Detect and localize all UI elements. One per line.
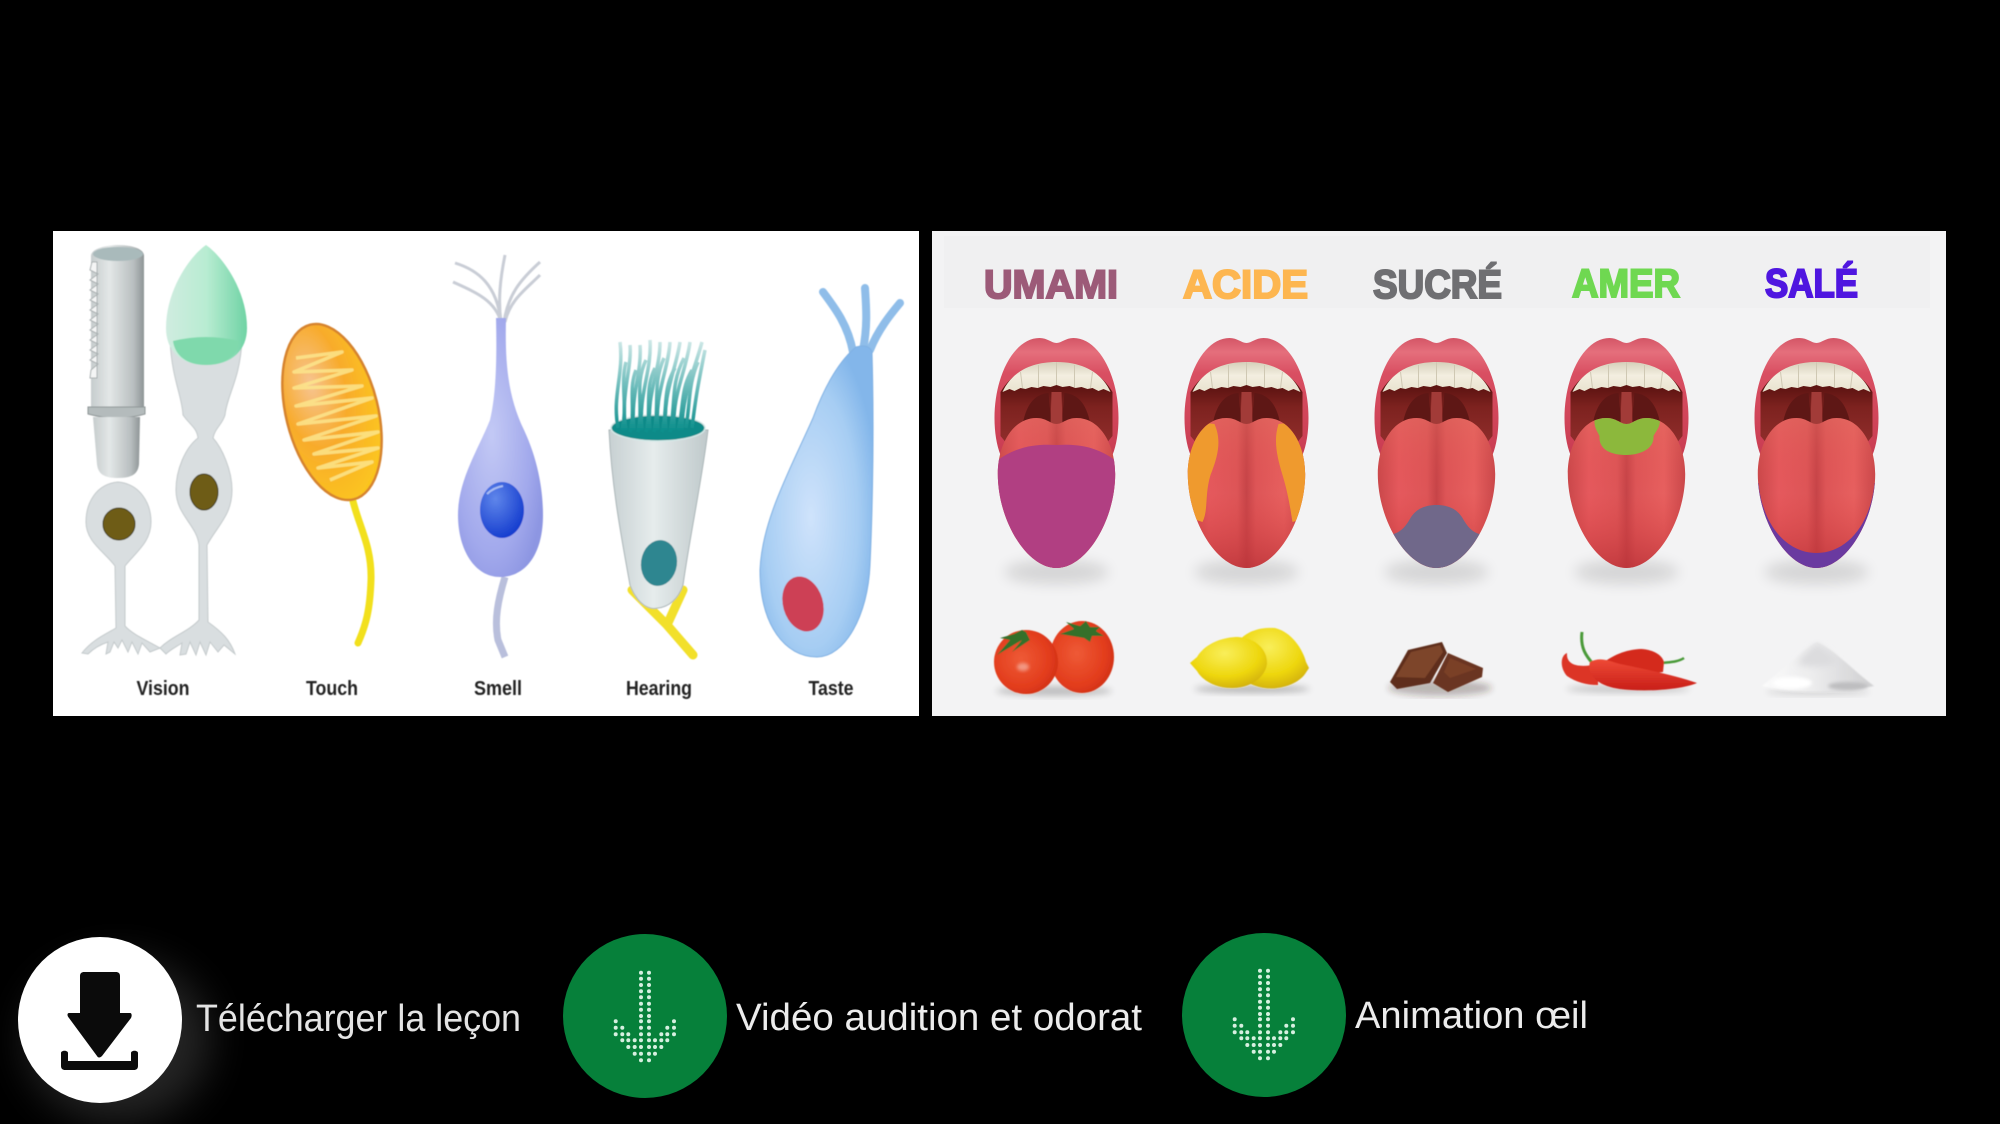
food: chocolate xyxy=(1388,642,1492,696)
icon: vision cone cell xyxy=(160,245,247,655)
icon: vision rod cell xyxy=(82,245,160,654)
text: Vidéo audition et odorat: Vidéo audition et odorat xyxy=(736,997,1142,1039)
label: Taste: Taste xyxy=(808,678,854,700)
panel: sensory cells xyxy=(53,231,919,716)
tongue: sucré xyxy=(1374,338,1498,584)
icon: hearing hair cell xyxy=(609,340,708,655)
label: Hearing: Hearing xyxy=(626,678,692,700)
heading: SALÉ: SALÉ xyxy=(1765,261,1858,306)
video button xyxy=(563,934,1142,1098)
tongue: amer xyxy=(1564,338,1688,584)
tongue: salé xyxy=(1746,338,1886,584)
animation button xyxy=(1182,933,1588,1097)
icon: green download circle xyxy=(1182,933,1346,1097)
tongue: umami xyxy=(986,338,1126,584)
label: Touch: Touch xyxy=(306,678,358,700)
icon: download circle xyxy=(18,937,182,1103)
text: Télécharger la leçon: Télécharger la leçon xyxy=(196,998,521,1040)
heading: AMER: AMER xyxy=(1572,262,1680,306)
tongue: acide xyxy=(1176,338,1316,584)
icon: smell receptor xyxy=(453,255,543,657)
food: tomatoes xyxy=(994,621,1114,696)
food: salt xyxy=(1762,642,1874,695)
icon: taste cell xyxy=(760,288,900,657)
icon glow xyxy=(26,958,210,1122)
label: Vision: Vision xyxy=(136,678,190,700)
heading: SUCRÉ: SUCRÉ xyxy=(1373,262,1502,307)
icon: green download circle xyxy=(563,934,727,1098)
download lesson button xyxy=(18,937,521,1122)
text: Animation œil: Animation œil xyxy=(1355,995,1588,1037)
food: lemons xyxy=(1190,628,1310,693)
panel: taste map xyxy=(932,231,1946,716)
heading: ACIDE: ACIDE xyxy=(1183,263,1308,307)
label: Smell: Smell xyxy=(474,678,522,700)
food: chili xyxy=(1562,632,1697,693)
heading: UMAMI: UMAMI xyxy=(984,263,1118,307)
icon: touch receptor xyxy=(266,314,398,643)
